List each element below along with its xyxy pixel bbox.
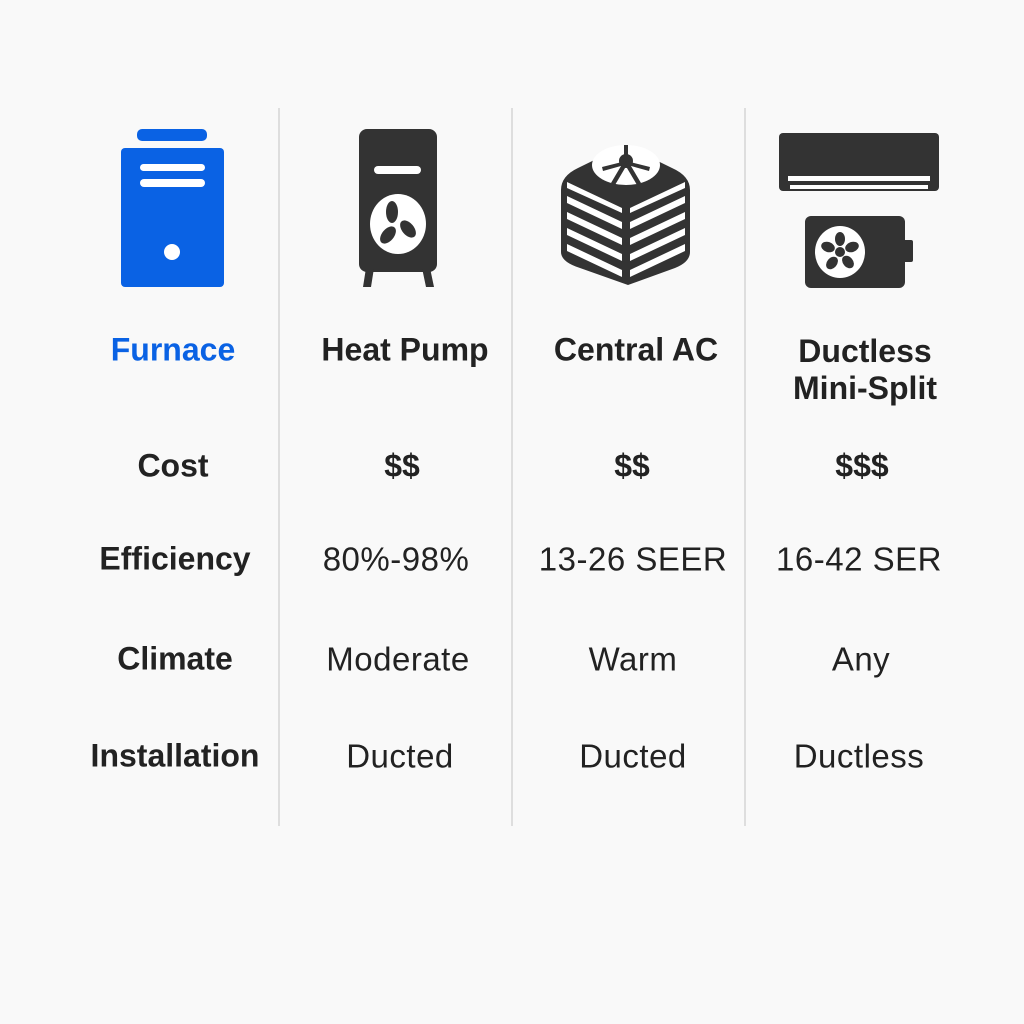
installation heat pump: Ducted — [346, 738, 454, 774]
cost value mini-split: $$$ — [835, 448, 889, 484]
row: cost: Cost — [137, 448, 209, 484]
climate heat pump: Moderate — [326, 640, 470, 678]
icon: furnace — [121, 129, 224, 287]
header: Furnace: Furnace — [111, 332, 235, 368]
efficiency mini-split: 16-42 SER — [776, 540, 942, 578]
icons — [121, 129, 939, 288]
header: Ductless Mini-Split: Ductless — [798, 333, 932, 369]
header: Ductless Mini-Split — [793, 333, 937, 406]
header: Heat Pump: Heat Pump — [321, 332, 489, 368]
row: installation: Installation — [91, 738, 259, 774]
row: climate: Climate — [117, 640, 233, 676]
installation mini-split: Ductless — [794, 738, 924, 774]
efficiency central AC: 13-26 SEER — [539, 540, 727, 578]
climate central AC: Warm — [589, 640, 677, 678]
cost value heat pump: $$ — [384, 448, 420, 484]
header: Central AC: Central AC — [554, 332, 718, 368]
cost value central AC: $$ — [614, 448, 650, 484]
icon: heat pump — [359, 129, 437, 287]
efficiency heat pump: 80%-98% — [323, 540, 469, 578]
installation central AC: Ducted — [579, 738, 687, 774]
icon: ductless mini-split — [779, 133, 939, 288]
icon: central AC — [561, 145, 690, 285]
climate mini-split: Any — [832, 640, 890, 678]
row: efficiency: Efficiency — [99, 540, 251, 576]
header: Ductless Mini-Split: Mini-Split — [793, 370, 937, 406]
